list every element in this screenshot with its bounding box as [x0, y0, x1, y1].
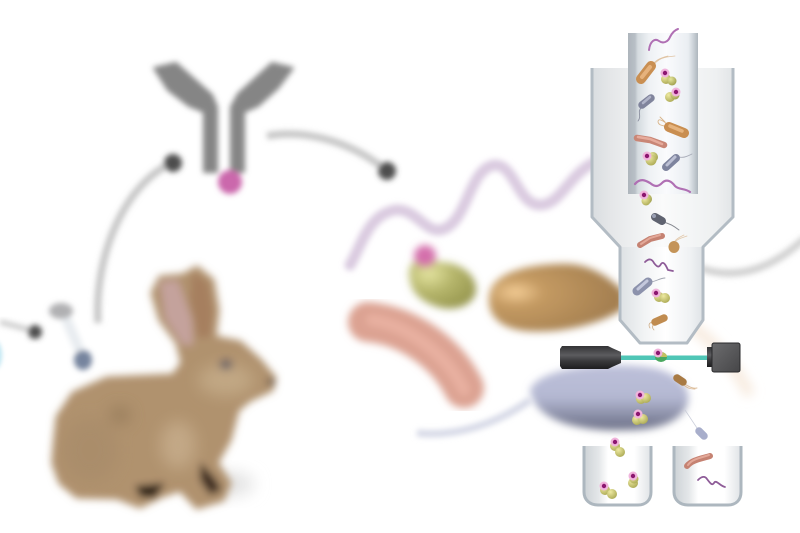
orange rod 1	[641, 56, 675, 79]
orange rod 3	[649, 318, 664, 330]
funnel outer sheath	[592, 68, 733, 343]
arrow: rabbit to antibody	[98, 154, 182, 323]
detector camera	[707, 343, 740, 372]
cocci 3	[642, 152, 658, 166]
spiral 1	[649, 29, 678, 50]
microbe stream in funnel	[635, 29, 692, 330]
rabbit body	[53, 267, 275, 508]
bacterium: pink rod, blurred	[368, 320, 464, 390]
grey rod 2	[666, 154, 692, 167]
bacterium: green cocci, blurred	[409, 245, 476, 309]
objective lens	[560, 346, 621, 369]
icon: antibody	[154, 63, 293, 194]
cocci 4	[640, 190, 652, 206]
bacterium: purple spiral, blurred	[350, 160, 600, 265]
arrow: from vessel to syringe	[0, 322, 42, 339]
grey rod deflected	[685, 410, 704, 436]
dark grey rod	[652, 214, 679, 230]
sorted cocci in left well	[600, 438, 638, 499]
rabbit	[53, 267, 275, 508]
bacterium: blue-grey rod, blurred	[417, 365, 689, 434]
grey rod 3	[637, 278, 665, 291]
pink rod in right well	[687, 455, 710, 466]
arrow: antibody to bacteria	[267, 134, 396, 180]
sorted microbes after beam	[632, 378, 704, 436]
gray arc behind funnel	[700, 238, 800, 273]
collection well: right	[674, 446, 741, 505]
spiral 2	[635, 180, 690, 192]
rabbit shadow	[202, 472, 254, 496]
icon: blue tube edge	[0, 340, 2, 370]
cocci 5	[652, 288, 670, 303]
cocci sorted 2	[632, 410, 648, 425]
inner tube	[628, 33, 698, 194]
orange coccus	[668, 235, 687, 253]
spiral in right well	[698, 477, 725, 487]
orange rod 2	[658, 117, 684, 133]
orange rod deflected	[677, 378, 697, 389]
rabbit shading	[62, 364, 254, 482]
pink rod 2	[640, 235, 662, 245]
laser beam	[621, 356, 708, 360]
labelled cell in beam	[654, 348, 667, 362]
flagella blur behind funnel	[690, 325, 750, 395]
collection well: left	[584, 438, 651, 505]
pink rod 1	[637, 137, 664, 145]
cocci 1	[660, 68, 676, 86]
icon: syringe	[49, 303, 92, 370]
cocci sorted 1	[636, 390, 651, 404]
cocci 2	[665, 88, 680, 102]
grey rod 1	[638, 97, 651, 121]
spiral 3	[645, 259, 673, 271]
bacterium: tan rod, blurred	[489, 264, 624, 332]
